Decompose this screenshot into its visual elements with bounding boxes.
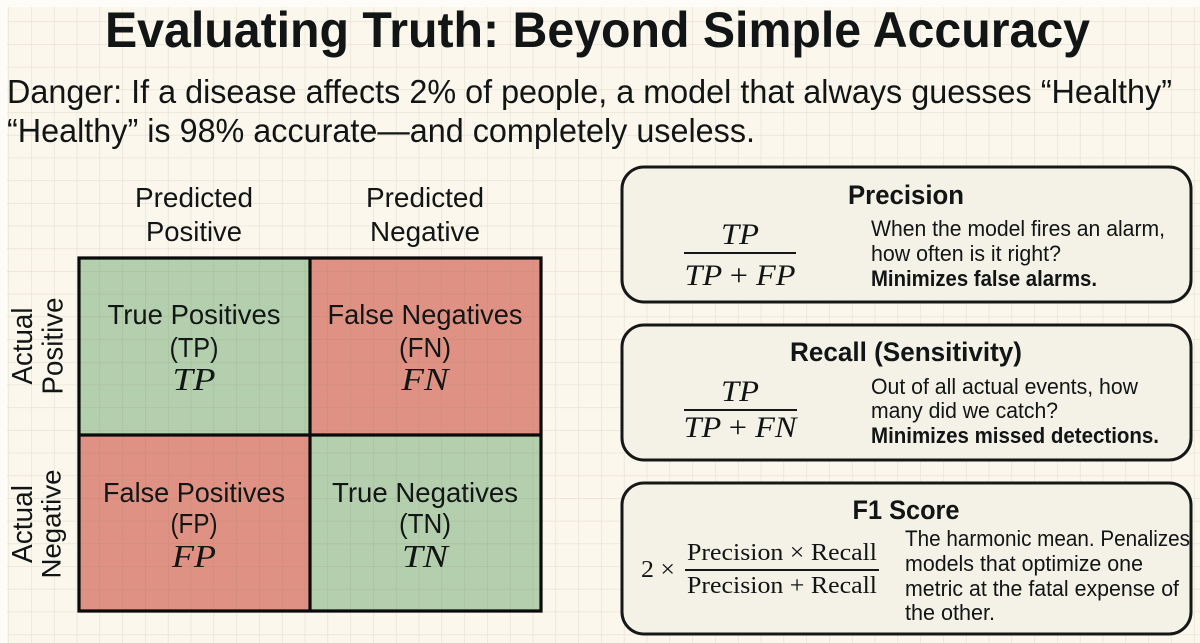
precision description: how often is it right? xyxy=(871,241,1061,266)
danger callout text: Danger: If a disease affects 2% of people, a model that always guesses “Healthy” xyxy=(7,73,1172,110)
danger callout text xyxy=(7,73,1172,149)
recall formula: TP + FN xyxy=(684,411,799,444)
confusion matrix xyxy=(7,182,541,611)
cell: true positives xyxy=(79,258,310,435)
cell: true negatives: True Negatives xyxy=(332,477,518,508)
cell: false positives: False Positives xyxy=(103,477,285,508)
f1 formula xyxy=(641,540,879,599)
column header: predicted negative xyxy=(366,182,484,247)
column header: predicted positive: Predicted xyxy=(135,182,253,213)
precision heading: Precision xyxy=(848,180,964,210)
cell: true negatives: TN xyxy=(402,538,450,574)
f1 heading: F1 Score xyxy=(852,495,960,525)
cell: false negatives: (FN) xyxy=(399,332,451,363)
f1 formula: Precision + Recall xyxy=(687,573,877,599)
cell: true positives: True Positives xyxy=(108,299,280,330)
f1 formula: Precision × Recall xyxy=(687,540,877,566)
precision formula: TP + FP xyxy=(684,259,796,292)
cell: true positives: (TP) xyxy=(170,332,218,363)
column header: predicted negative: Negative xyxy=(370,216,480,247)
cell: false positives: FP xyxy=(171,538,216,574)
cell: true negatives: (TN) xyxy=(399,508,451,539)
column header: predicted positive: Positive xyxy=(146,216,242,247)
precision formula xyxy=(684,218,796,292)
panel: f1 score xyxy=(622,483,1191,634)
danger callout text: “Healthy” is 98% accurate—and completely useless. xyxy=(7,112,755,149)
f1 description: metric at the fatal expense of xyxy=(905,576,1180,601)
row header: actual positive: Actual xyxy=(7,308,39,384)
recall formula: TP xyxy=(721,375,759,408)
cell: true negatives xyxy=(310,435,541,611)
f1 description: the other. xyxy=(905,600,995,625)
row header: actual negative: Negative xyxy=(36,470,66,578)
cell: false negatives xyxy=(310,258,541,435)
column header: predicted negative: Predicted xyxy=(366,182,484,213)
f1 description xyxy=(905,526,1190,625)
f1 description: models that optimize one xyxy=(905,551,1143,576)
row header: actual positive: Positive xyxy=(38,298,70,394)
panel: recall xyxy=(622,325,1191,460)
recall description: Out of all actual events, how xyxy=(871,374,1138,399)
row header: actual negative: Actual xyxy=(7,485,39,563)
recall description: many did we catch? xyxy=(871,398,1058,423)
f1 formula: 2 × xyxy=(641,557,675,583)
title: Evaluating Truth: Beyond Simple Accuracy xyxy=(105,2,1090,58)
recall description: Minimizes missed detections. xyxy=(871,423,1159,448)
f1 description: The harmonic mean. Penalizes xyxy=(905,526,1190,551)
cell: false positives: (FP) xyxy=(170,508,218,539)
precision formula: TP xyxy=(721,218,759,251)
row header: actual positive xyxy=(7,298,70,394)
recall heading: Recall (Sensitivity) xyxy=(790,337,1022,367)
cell: false negatives: FN xyxy=(400,361,450,397)
precision description: When the model fires an alarm, xyxy=(871,216,1165,241)
column header: predicted positive xyxy=(135,182,253,247)
precision description: Minimizes false alarms. xyxy=(871,266,1097,291)
matrix frame xyxy=(79,258,541,611)
row header: actual negative xyxy=(7,470,66,578)
cell: false negatives: False Negatives xyxy=(328,299,522,330)
cell: true positives: TP xyxy=(172,361,216,397)
recall description xyxy=(871,374,1159,448)
panel: precision xyxy=(622,167,1191,302)
recall formula xyxy=(684,375,799,444)
precision description xyxy=(871,216,1165,291)
cell: false positives xyxy=(79,435,310,611)
